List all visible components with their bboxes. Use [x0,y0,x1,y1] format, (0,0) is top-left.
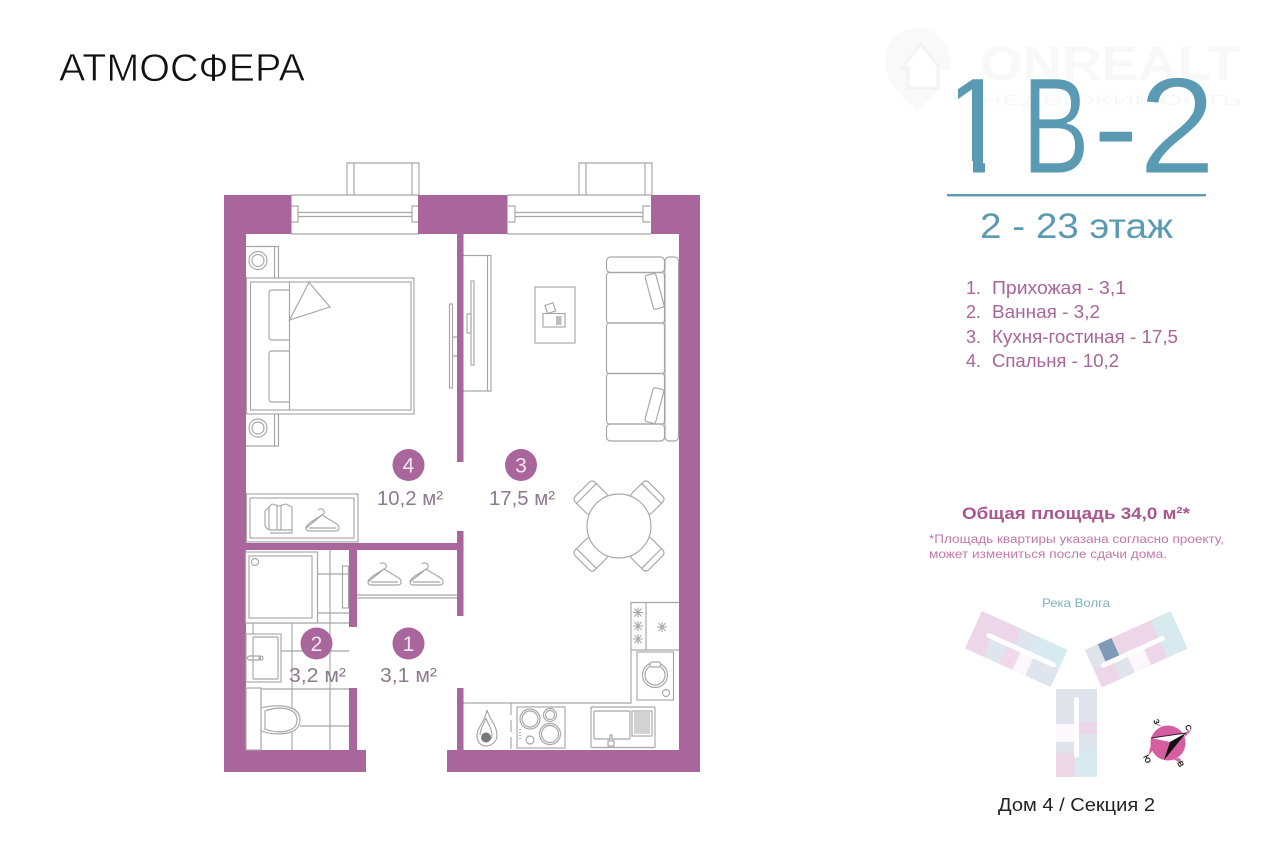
title underline [947,194,1206,196]
room marker: 2 bathroom: 3,2 м² [289,665,346,687]
key plan: building sections [965,611,1188,777]
room list: Прихожая - 3,1 [992,278,1126,298]
room marker: 4 bedroom: 4 [403,454,415,478]
bed [246,278,414,414]
floor plan [224,163,700,772]
bedroom wardrobe [246,494,358,542]
total area: Общая площадь 34,0 м²* [962,504,1190,523]
room marker: 2 bathroom [289,628,346,687]
room marker: 1 hallway: 3,1 м² [380,665,437,687]
room list: 2. [966,302,981,322]
area note: может измениться после сдачи дома. [929,547,1167,561]
dining table [572,479,666,573]
room list: 1. [966,278,981,298]
room marker: 4 bedroom: 10,2 м² [377,488,443,510]
room marker: 1 hallway [380,628,437,687]
room marker: 2 bathroom: 2 [311,633,322,656]
compass [1141,718,1194,769]
title: apartment type: 1 [937,50,1013,203]
room list: Спальня - 10,2 [992,351,1119,371]
kitchen sink [591,707,655,748]
room marker: 3 kitchen-living: 3 [515,454,527,478]
sofa [606,257,678,441]
walls [224,195,700,772]
compass: С [1183,723,1194,732]
bedroom TV [450,304,457,388]
room list: Ванная - 3,2 [992,302,1100,322]
shower [246,552,318,623]
compass: Ю [1141,754,1153,765]
room list: 4. [966,351,981,371]
cooktop [517,707,565,748]
hallway wardrobe [357,563,457,598]
compass: З [1151,718,1161,726]
section caption: Дом 4 / Секция 2 [998,795,1155,815]
kitchen counter [464,602,679,750]
room marker: 3 kitchen-living: 17,5 м² [489,488,555,510]
hanger icon [410,563,443,585]
nightstand [246,246,278,278]
logo: Атмосфера: АТМОСФЕРА [59,47,305,90]
washing machine [637,652,674,700]
area note: *Площадь квартиры указана согласно проекту, [929,532,1224,546]
bottom wing [1056,689,1097,777]
living room TV cabinet [464,256,491,391]
room marker: 4 bedroom [377,449,443,510]
coffee table [535,287,575,343]
river label: Река Волга [1042,596,1110,610]
watermark: ONREALT: ONREALT [980,38,1240,91]
title: apartment type: В [1022,49,1090,203]
bathroom sink [246,634,281,682]
compass: В [1175,760,1186,769]
area note [929,532,1224,561]
toilet [246,688,300,750]
nightstand [246,414,278,446]
towel rail [342,566,348,608]
room list [966,278,1178,371]
right wing with highlighted apartment [1085,611,1188,687]
hanger icon [306,509,339,531]
bathroom tiles [246,550,349,750]
balconies and windows [291,163,652,234]
room list: 3. [966,327,981,347]
room marker: 3 kitchen-living [489,449,555,510]
title: apartment type: 2 [1139,50,1215,203]
watermark: ONREALT [885,28,1242,111]
room list: Кухня-гостиная - 17,5 [992,327,1178,347]
boiler flame icon [477,710,497,746]
watermark: ONREALT: НЕДВИЖИМОСТЬ [980,92,1242,109]
left wing [965,611,1068,687]
hanger icon [368,563,401,585]
floor range: 2 - 23 этаж [980,207,1174,246]
title: apartment type [937,49,1215,203]
room marker: 1 hallway: 1 [403,633,414,656]
title: apartment type: - [1093,50,1139,203]
shirt icon [265,504,292,533]
